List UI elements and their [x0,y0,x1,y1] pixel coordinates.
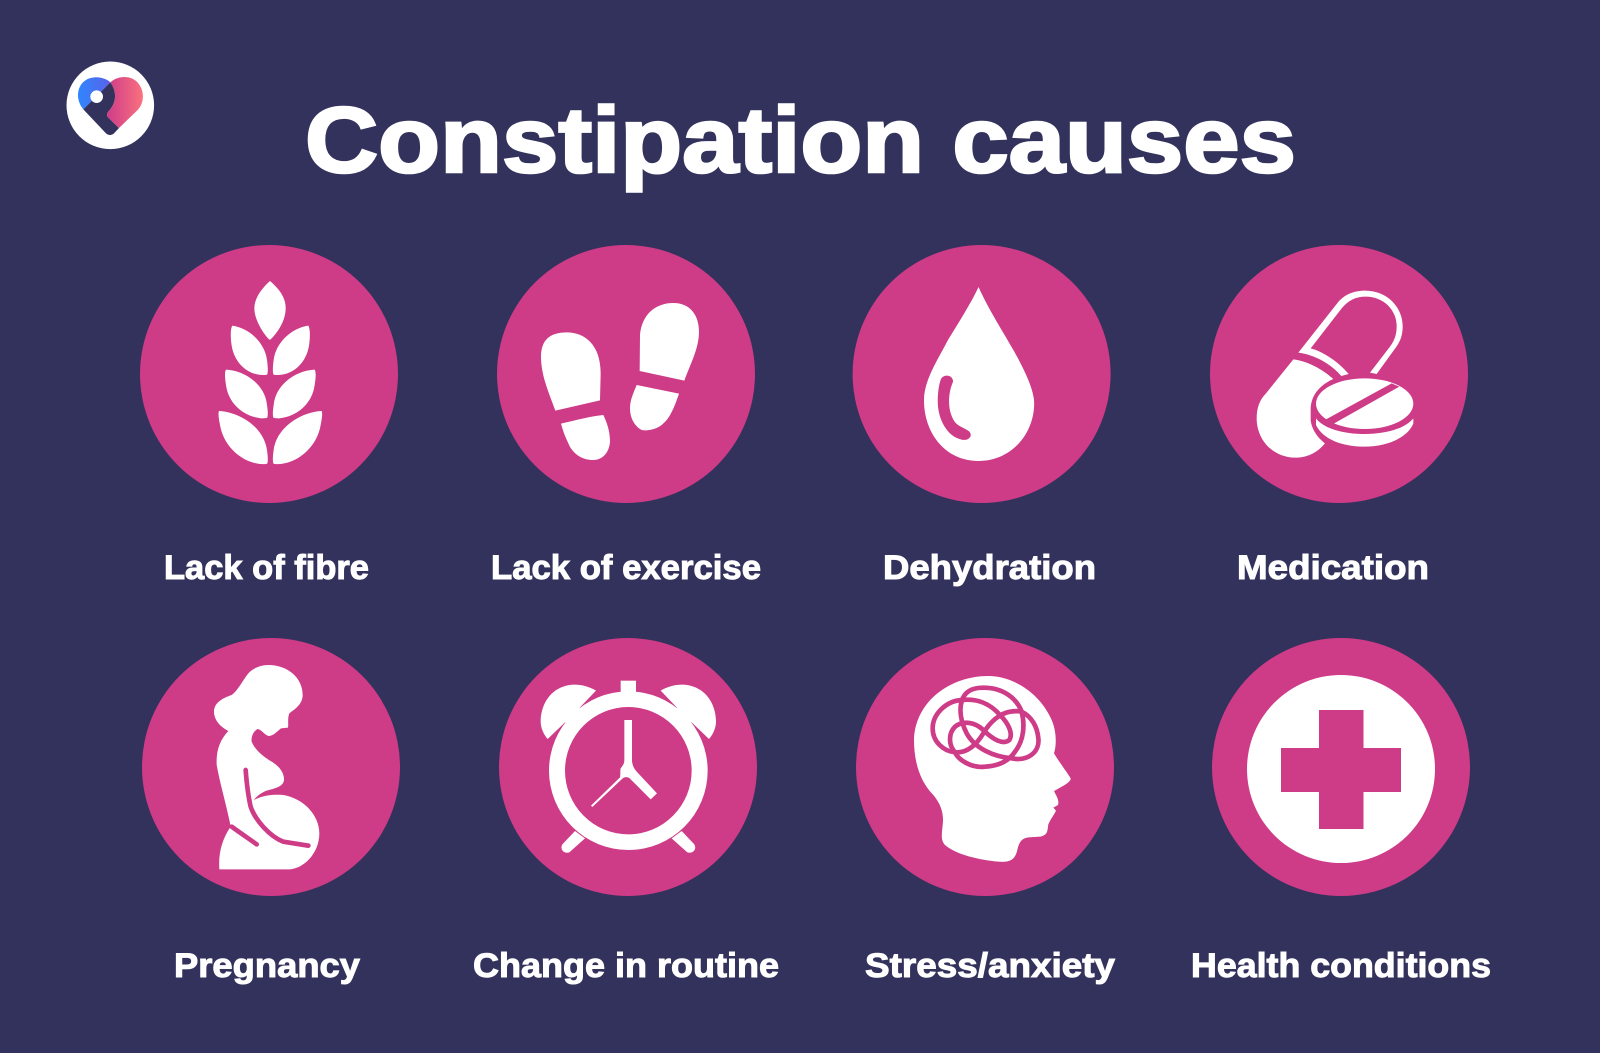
icon: medical cross [1247,675,1435,863]
label: lack of exercise: Lack of exercise [491,549,761,587]
circle: pregnancy background [142,638,400,896]
panel: pregnancy [142,638,400,985]
circle: dehydration background [853,245,1111,503]
icon: pregnant woman [214,665,319,869]
panel: change in routine [473,638,779,985]
panel: medication [1210,245,1468,587]
panel: lack of exercise [491,245,761,587]
label: medication: Medication [1237,549,1429,587]
label: lack of fibre: Lack of fibre [164,549,369,587]
circle: lack of fibre background [140,245,398,503]
icon: water drop [924,287,1034,461]
panel: stress/anxiety [856,638,1115,985]
label: dehydration: Dehydration [883,549,1096,587]
label: change in routine: Change in routine [473,947,779,985]
icon: capsule and tablet [1257,291,1413,458]
logo: heart pin [66,62,154,149]
label: health conditions: Health conditions [1191,947,1491,985]
title: Constipation causes [305,88,1296,192]
icon: wheat [219,281,322,464]
circle: medication background [1210,245,1468,503]
circle: change in routine background [499,638,757,896]
circle: health conditions background [1212,638,1470,896]
panel: dehydration [853,245,1111,587]
circle: stress/anxiety background [856,638,1114,896]
icon: footprints [541,303,699,460]
label: stress/anxiety: Stress/anxiety [865,947,1115,985]
panel: health conditions [1191,638,1491,985]
panel: lack of fibre [140,245,398,587]
label: pregnancy: Pregnancy [174,947,360,985]
icon: head with tangled thoughts [914,676,1071,862]
icon: alarm clock [541,681,716,853]
circle: lack of exercise background [497,245,755,503]
